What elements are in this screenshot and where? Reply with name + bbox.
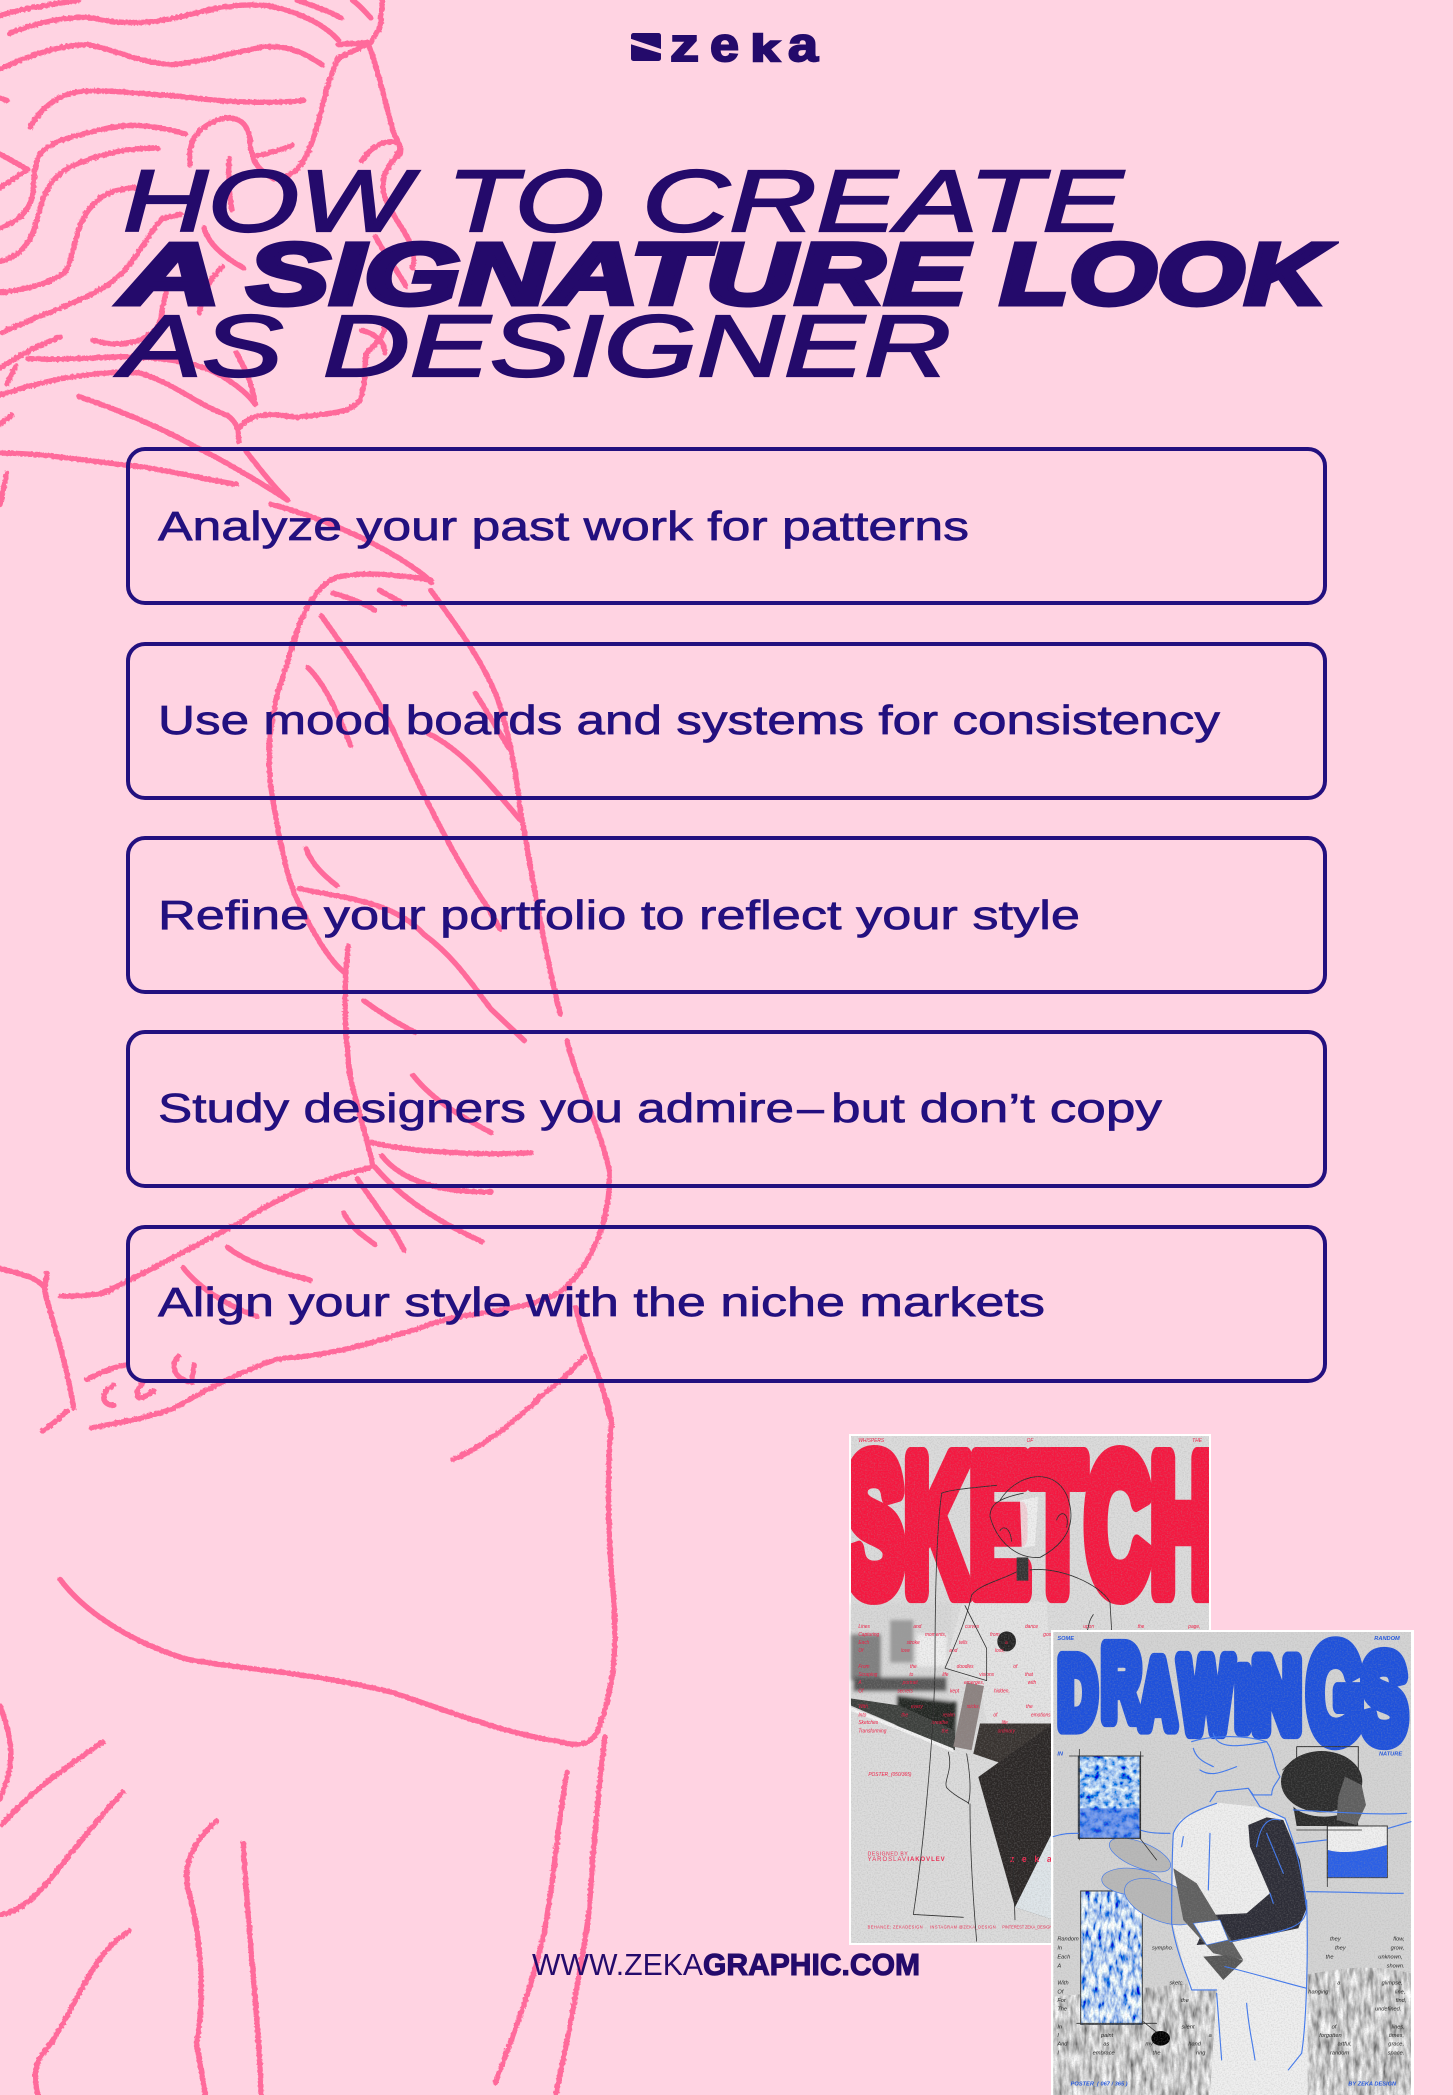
poster body text: a bbox=[1337, 1981, 1340, 1987]
poster body text: Of bbox=[1057, 1989, 1065, 1995]
poster body text: hand bbox=[1188, 2042, 1202, 2048]
poster body text: grow, bbox=[1391, 1946, 1404, 1952]
poster small text: zeka bbox=[1010, 1854, 1053, 1864]
poster body text: flow, bbox=[1393, 1937, 1405, 1943]
title line 1: HOW bbox=[123, 153, 419, 250]
poster small text: and bbox=[913, 1624, 922, 1630]
corner labels: IN bbox=[1057, 1752, 1064, 1758]
poster small text: doodles bbox=[957, 1664, 974, 1670]
poster small text: Lines bbox=[858, 1624, 870, 1630]
title line 2: A bbox=[118, 226, 221, 323]
poster body text: A bbox=[1056, 1963, 1061, 1969]
blue bubble title: S bbox=[1361, 1630, 1407, 1766]
poster small text: stroke bbox=[907, 1640, 920, 1646]
website url: GRAPHIC.COM bbox=[703, 1947, 920, 1982]
blue bubble title: R bbox=[1102, 1625, 1141, 1741]
website url: WWW.ZEKA bbox=[532, 1947, 703, 1982]
title line 1: CREATE bbox=[642, 153, 1124, 250]
poster small text: a bbox=[1005, 1640, 1008, 1646]
poster body text: And bbox=[1056, 2042, 1068, 2048]
poster small text: that bbox=[1025, 1672, 1034, 1678]
poster body text: With bbox=[1057, 1981, 1069, 1987]
dark sleeve bbox=[1197, 1817, 1307, 1945]
corner labels: SOME bbox=[1057, 1636, 1074, 1642]
blue bubble title: A bbox=[1140, 1642, 1176, 1746]
blue wave square bbox=[1327, 1826, 1387, 1878]
poster small text: the bbox=[1138, 1624, 1145, 1630]
poster small text: and bbox=[949, 1648, 958, 1654]
panel: tip 3 bbox=[128, 838, 1325, 992]
poster body text: they bbox=[1335, 1946, 1347, 1952]
poster body text: In bbox=[1057, 2024, 1062, 2030]
poster body text: forgotten bbox=[1319, 2033, 1342, 2039]
figure body bbox=[1172, 1803, 1308, 2095]
panel: tip 2 bbox=[128, 644, 1325, 798]
poster small text: Scraping bbox=[858, 1672, 878, 1678]
torso and leg lines bbox=[0, 1400, 615, 2095]
poster small text: BEHANCE: ZEKADESIGN bbox=[868, 1924, 923, 1929]
poster small text: Sketches bbox=[858, 1720, 879, 1726]
poster body text: unknown, bbox=[1378, 1954, 1403, 1960]
poster small text: the bbox=[942, 1728, 949, 1734]
poster body text: I bbox=[1057, 2050, 1059, 2056]
poster body text: hanging bbox=[1308, 1989, 1329, 1995]
poster small text: life bbox=[942, 1672, 949, 1678]
poster small text bbox=[857, 1438, 1203, 1929]
poster body text: Random bbox=[1057, 1937, 1079, 1943]
head and hair lines bbox=[0, 0, 431, 700]
poster small text: loss, bbox=[995, 1648, 1005, 1654]
poster body text: shown. bbox=[1387, 1963, 1405, 1969]
poster small text: portrait bbox=[902, 1680, 918, 1686]
blue line figure bbox=[1053, 1733, 1411, 2070]
poster small text: to bbox=[909, 1672, 914, 1678]
woman photo head bbox=[1281, 1751, 1366, 1826]
panel: tip 2: Use mood boards and systems for consistency bbox=[158, 697, 1221, 743]
poster small text: emerges, bbox=[964, 1680, 984, 1686]
poster small text: ordinary bbox=[998, 1728, 1016, 1734]
poster body text: lines, bbox=[1392, 2024, 1405, 2030]
poster small text: With bbox=[858, 1704, 868, 1710]
title bbox=[114, 153, 1334, 395]
sketch line figure bbox=[913, 1477, 1112, 1941]
poster small text: A bbox=[857, 1680, 862, 1686]
poster small text: DESIGNED BY bbox=[868, 1851, 908, 1858]
poster body text bbox=[1056, 1937, 1406, 2056]
logo wordmark: z bbox=[670, 18, 699, 71]
logo wordmark bbox=[670, 18, 818, 72]
poster small text: PINTEREST ZEKA_DESIGN bbox=[1002, 1924, 1052, 1929]
poster body text: the bbox=[1326, 1954, 1334, 1960]
poster body text: my bbox=[1145, 2042, 1154, 2048]
poster small text: of bbox=[993, 1712, 998, 1718]
poster body text: find, bbox=[1396, 1998, 1406, 2004]
title line 2: SIGNATURE bbox=[247, 226, 971, 323]
poster small text: OF bbox=[1027, 1438, 1034, 1444]
poster small text: the bbox=[1026, 1704, 1033, 1710]
blue photo 1 bbox=[1078, 1756, 1140, 1838]
poster body text: they bbox=[1330, 1937, 1342, 1943]
poster small text: Into bbox=[858, 1712, 867, 1718]
poster: Drawings bbox=[1051, 1616, 1414, 2095]
title line 3: DESIGNER bbox=[323, 298, 951, 395]
blue bubble title bbox=[1057, 1636, 1410, 1750]
poster: Sketch bbox=[844, 1417, 1216, 1945]
poster small text: secrets bbox=[897, 1688, 913, 1694]
panel: tip 3: Refine your portfolio to reflect your style bbox=[158, 892, 1080, 938]
title line 3 bbox=[114, 298, 951, 395]
poster small text: sticks, bbox=[967, 1704, 980, 1710]
poster small text: every bbox=[911, 1704, 923, 1710]
poster body text: For bbox=[1057, 1998, 1067, 2004]
poster body text: sketc. bbox=[1169, 1981, 1184, 1987]
poster small text: curves bbox=[965, 1624, 980, 1630]
thin black connector lines bbox=[1069, 1749, 1362, 2046]
logo: zeka bbox=[630, 18, 818, 72]
poster small text: moments, bbox=[925, 1632, 946, 1638]
blue bubble title: N bbox=[1253, 1638, 1301, 1752]
poster body text: glimpse, bbox=[1382, 1981, 1403, 1987]
title line 1: TO bbox=[447, 153, 604, 250]
title line 2 bbox=[118, 226, 1334, 323]
poster small text: dance bbox=[1025, 1624, 1038, 1630]
paper grain bbox=[1053, 1632, 1411, 2095]
poster small text: the bbox=[901, 1712, 908, 1718]
poster body text: The bbox=[1057, 2007, 1067, 2013]
poster small text: emotions bbox=[1031, 1712, 1051, 1718]
poster small text: WHISPERS bbox=[858, 1438, 885, 1444]
poster small text: from bbox=[990, 1632, 1000, 1638]
poster small text: Of bbox=[858, 1688, 864, 1694]
poster body text: paint bbox=[1100, 2033, 1114, 2039]
poster body text: Each bbox=[1057, 1954, 1070, 1960]
poster small text: breathe bbox=[932, 1720, 948, 1726]
panel: tip 5: Align your style with the niche markets bbox=[158, 1279, 1045, 1325]
logo icon bbox=[630, 33, 661, 61]
poster small text: From bbox=[858, 1664, 870, 1670]
poster body text: undefined. bbox=[1375, 2007, 1401, 2013]
poster small text: Capturing bbox=[858, 1632, 879, 1638]
poster small text: life bbox=[1002, 1720, 1008, 1726]
bouquet bbox=[1101, 1831, 1243, 1980]
poster body text: a bbox=[1209, 2033, 1212, 2039]
poster body text: grace, bbox=[1388, 2042, 1404, 2048]
poster body text: In bbox=[1057, 1946, 1062, 1952]
panel: tip 4 bbox=[128, 1032, 1325, 1186]
logo wordmark: k bbox=[751, 28, 780, 69]
poster body text: line, bbox=[1395, 1989, 1405, 1995]
panel: tip 1 bbox=[128, 449, 1325, 603]
poster small text: Of bbox=[858, 1648, 864, 1654]
blue photo 2 bbox=[1081, 1891, 1142, 2025]
poster body text: ring bbox=[1196, 2050, 1206, 2056]
poster small text: THE bbox=[1192, 1438, 1203, 1444]
logo wordmark: e bbox=[710, 19, 739, 72]
poster small text: love bbox=[901, 1648, 910, 1654]
illustration: pink line drawing of a figure bbox=[0, 0, 615, 2095]
poster small text: Transforming bbox=[858, 1728, 887, 1734]
blue bubble title: W bbox=[1179, 1636, 1233, 1752]
photo collage area bbox=[851, 1598, 1053, 1920]
poster small text: upon bbox=[1083, 1624, 1094, 1630]
poster body text: times, bbox=[1389, 2033, 1404, 2039]
rear rectangle outline bbox=[1296, 1746, 1359, 1770]
poster small text: kept bbox=[950, 1688, 960, 1694]
blue bubble title: I bbox=[1236, 1653, 1250, 1746]
poster small text: Each bbox=[858, 1640, 870, 1646]
poster small text: tells bbox=[959, 1640, 968, 1646]
panel: tip 4: Study designers you admire bbox=[158, 1085, 794, 1131]
poster small text: YAROSLAV bbox=[868, 1856, 907, 1863]
corner labels: NATURE bbox=[1379, 1752, 1402, 1758]
poster small text: the bbox=[910, 1664, 917, 1670]
corner labels: POSTER_( 067 / 365 ) bbox=[1071, 2082, 1128, 2088]
corner labels: BY ZEKA DESIGN bbox=[1348, 2082, 1397, 2088]
panel: tip 1: Analyze your past work for patterns bbox=[158, 503, 969, 549]
panel: tip 4: — bbox=[797, 1085, 824, 1131]
title line 2: LOOK bbox=[1000, 226, 1334, 323]
paper grain bbox=[851, 1436, 1209, 1943]
poster body text: as bbox=[1103, 2042, 1109, 2048]
arm and hand lines bbox=[0, 590, 609, 1431]
blue bubble title: D bbox=[1058, 1640, 1097, 1747]
poster body text: silent bbox=[1181, 2024, 1195, 2030]
poster body text: the bbox=[1153, 2050, 1161, 2056]
panel: tip 4: but don’t copy bbox=[831, 1085, 1163, 1131]
poster small text: POSTER_(050/365) bbox=[868, 1772, 912, 1778]
poster body text: space. bbox=[1388, 2050, 1404, 2056]
poster body text: of bbox=[1332, 2024, 1338, 2030]
poster body text: random bbox=[1330, 2050, 1349, 2056]
poster small text: gos bbox=[1043, 1632, 1052, 1638]
poster body text: artful, bbox=[1338, 2042, 1352, 2048]
poster small text: page, bbox=[1187, 1624, 1200, 1630]
poster small text: IAKOVLEV bbox=[907, 1856, 945, 1863]
poster small text: of bbox=[1013, 1664, 1018, 1670]
poster body text: embrace bbox=[1093, 2050, 1115, 2056]
logo wordmark: a bbox=[788, 19, 818, 72]
poster body text: I bbox=[1057, 2033, 1059, 2039]
panel: tip 5 bbox=[128, 1227, 1325, 1381]
poster body text: the bbox=[1181, 1998, 1189, 2004]
title line 1 bbox=[123, 153, 1124, 250]
poster small text: INSTAGRAM @ZEKA_DESIGN bbox=[930, 1924, 996, 1929]
title line 3: AS bbox=[114, 298, 283, 395]
poster small text: visions bbox=[979, 1672, 995, 1678]
poster small text: hidden, bbox=[994, 1688, 1010, 1694]
poster body text: sympho. bbox=[1152, 1946, 1173, 1952]
poster small text: realm bbox=[943, 1712, 955, 1718]
blue bubble title: G bbox=[1307, 1616, 1364, 1769]
website url bbox=[532, 1947, 920, 1982]
corner labels: RANDOM bbox=[1374, 1636, 1400, 1642]
grass photo bbox=[1053, 1960, 1411, 2095]
corner labels bbox=[1057, 1636, 1402, 2088]
poster small text: with bbox=[1028, 1680, 1036, 1686]
